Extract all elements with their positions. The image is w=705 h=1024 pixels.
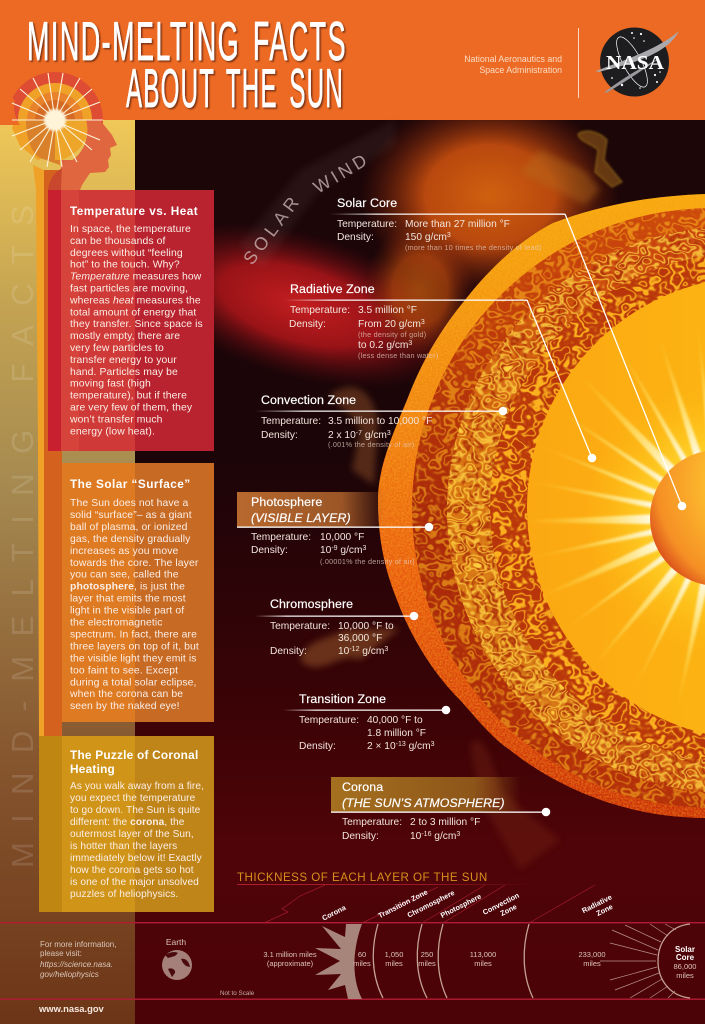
panel: temperature vs heat: moving fast (high (70, 379, 151, 390)
panel: the puzzle of coronal heating: As you walk away from a fire, (70, 781, 204, 792)
layer labels: Transition Zone (377, 887, 429, 920)
callout: chromosphere: Temperature: (270, 621, 330, 632)
panel: the solar surface: three layers on top of it, but (70, 641, 199, 652)
panel: temperature vs heat: hot” to the touch. Why? (70, 260, 180, 271)
panel: temperature vs heat: total amount of energy that (70, 307, 196, 318)
callout: convection zone: (.001% the density of air) (328, 440, 414, 449)
agency name: National Aeronautics and (464, 54, 562, 64)
thickness diagram (0, 885, 705, 1000)
callout: photosphere: (VISIBLE LAYER) (251, 511, 351, 525)
callout: convection zone: 3.5 million to 10,000 °F (328, 416, 432, 427)
callout: chromosphere: Chromosphere (270, 597, 353, 611)
callout: corona: Temperature: (342, 817, 402, 828)
agency name: Space Administration (479, 65, 562, 75)
panel: the puzzle of coronal heating: puzzles of heliophysics. (70, 889, 178, 900)
callout: photosphere: -9 (331, 545, 338, 552)
callout: corona: 10 (410, 831, 422, 842)
more information text: For more information, (40, 940, 116, 949)
layer thickness values: 86,000 (674, 962, 696, 971)
more information text (40, 940, 116, 979)
callout: convection zone: Convection Zone (261, 393, 356, 407)
panel: temperature vs heat: fast particles are moving, (70, 284, 188, 294)
panel: temperature vs heat: mostly empty, there are (70, 331, 180, 342)
callout: radiative zone: (less dense than water) (358, 351, 438, 360)
callout: photosphere: Density: (251, 545, 288, 556)
icon: corona spikes (315, 924, 362, 999)
callout: transition zone: Temperature: (299, 715, 359, 726)
callout: radiative zone (285, 282, 596, 462)
callout: transition zone: Transition Zone (299, 692, 386, 706)
panel: temperature vs heat: In space, the temperature (70, 224, 191, 235)
sun cross-section (370, 190, 705, 830)
scale note: Not to Scale (220, 990, 255, 997)
callout: chromosphere: Density: (270, 646, 307, 657)
panel: the puzzle of coronal heating (39, 736, 214, 912)
panel: the solar surface: layer that emits the most (70, 594, 186, 605)
panel: the solar surface: when the corona can be (69, 689, 183, 700)
heading: thickness of each layer: THICKNESS OF EACH LAYER OF THE SUN (237, 871, 488, 884)
callout: convection zone (255, 393, 507, 449)
callout: photosphere (237, 492, 433, 566)
panel: the solar surface: towards the core. The layer (70, 558, 199, 569)
icon: NASA logo (596, 28, 679, 96)
panel: the solar surface (62, 463, 214, 722)
panel: temperature vs heat: can be thousands of (70, 236, 166, 247)
layer thickness values: (approximate) (267, 959, 314, 968)
panel: temperature vs heat: temperature), but if there (70, 391, 187, 402)
callout: solar core: 150 g/cm (405, 232, 447, 243)
more information text: please visit: (40, 949, 82, 958)
panel: temperature vs heat: they transfer. Since space is (70, 319, 203, 330)
panel: the solar surface: , is just the (134, 582, 185, 593)
layer thickness values: 113,000 (470, 950, 496, 959)
gold left column (0, 120, 135, 1024)
website: www.nasa.gov (38, 1003, 105, 1014)
icon: solar core (600, 924, 690, 998)
panel: temperature vs heat: Temperature vs. Heat (70, 204, 198, 218)
layer labels: Convection (481, 891, 521, 917)
callout: solar core: (more than 10 times the density of lead) (405, 243, 542, 252)
callout: transition zone: 3 (431, 741, 435, 748)
layer labels (320, 887, 617, 925)
panel: temperature vs heat (48, 190, 214, 451)
more information text: gov/heliophysics (40, 970, 99, 979)
panel: the solar surface: the visible light they emit is (70, 653, 197, 664)
layer thickness values: 60 (358, 950, 366, 959)
callout: radiative zone: to 0.2 g/cm (358, 340, 408, 351)
callout: chromosphere: 10 (338, 646, 350, 657)
panel: temperature vs heat: whereas (69, 295, 113, 306)
callout: convection zone: 3 (387, 430, 391, 437)
panel: the solar surface: gas, the density gradually (70, 534, 191, 545)
orange header band (0, 0, 705, 120)
panel: temperature vs heat: won’t transfer much (69, 414, 163, 425)
panel: temperature vs heat: energy (low heat). (70, 426, 155, 437)
layer labels: Radiative (580, 892, 613, 915)
panel: the puzzle of coronal heating: immediately below it! Exactly (70, 853, 203, 864)
more information text: https://science.nasa. (40, 960, 113, 969)
icon: earth: Earth (166, 937, 186, 947)
callout: solar core: 3 (447, 232, 451, 239)
heading: solar wind (239, 120, 395, 268)
panel: temperature vs heat: Temperature (70, 272, 130, 283)
callout: convection zone: g/cm (362, 430, 387, 441)
callout: corona: Density: (342, 831, 379, 842)
callout: corona: g/cm (431, 831, 456, 842)
callout: convection zone: Density: (261, 430, 298, 441)
layer labels: Photosphere (439, 892, 483, 920)
panel: temperature vs heat: heat measures the (113, 295, 201, 306)
panel: temperature vs heat: degrees without “feeling (70, 248, 183, 259)
panel: the solar surface: you can see, called the (70, 570, 179, 581)
panel: the solar surface: spectrum. In fact, there are (70, 629, 197, 640)
panel: temperature vs heat: are very few of them, they (70, 402, 193, 414)
callout: transition zone: 2 × 10 (367, 741, 396, 752)
layer thickness values: 3.1 million miles (263, 950, 317, 959)
callout: photosphere: 3 (362, 545, 366, 552)
layer thickness values: 250 (421, 950, 433, 959)
callout: transition zone: Density: (299, 741, 336, 752)
panel: the puzzle of coronal heating: to go down. The Sun is quite (70, 805, 201, 816)
callout: convection zone: Temperature: (261, 416, 321, 427)
callout: corona: (THE SUN’S ATMOSPHERE) (342, 796, 504, 810)
callout: solar core: More than 27 million °F (405, 219, 510, 230)
callout: corona: 3 (456, 831, 460, 838)
callout: solar core: Temperature: (337, 219, 397, 230)
callout: photosphere: (.00001% the density of air) (320, 557, 415, 566)
agency name (464, 54, 562, 75)
callout: chromosphere: -12 (349, 646, 360, 653)
layer thickness values: miles (583, 959, 601, 968)
layer thickness values: 1,050 (385, 950, 403, 959)
icon: earth (162, 937, 192, 980)
callout: photosphere: Temperature: (251, 532, 311, 543)
panel: the puzzle of coronal heating: is hotter than the layers (70, 841, 177, 852)
panel: temperature vs heat: transfer energy to your (70, 355, 177, 366)
panel: the solar surface: during a total solar eclipse, (70, 677, 197, 688)
callout: convection zone: 2 x 10 (328, 430, 356, 441)
callout: chromosphere: 3 (384, 646, 388, 653)
callout: transition zone: 40,000 °F to (367, 715, 423, 726)
callout: radiative zone: From 20 g/cm (358, 319, 421, 330)
callout: radiative zone: Density: (289, 319, 326, 330)
panel: the puzzle of coronal heating: The Puzzle of Coronal (70, 748, 198, 762)
panel: the solar surface: light in the visible part of (70, 606, 184, 617)
callout: radiative zone: (the density of gold) (358, 330, 426, 339)
panel: the solar surface: the electromagnetic (70, 618, 163, 628)
panel: temperature vs heat: measures how (130, 272, 202, 283)
panel: the solar surface: ball of plasma, or ionized (70, 522, 188, 533)
panel: temperature vs heat: very few particles to (70, 343, 164, 354)
layer thickness values: miles (474, 959, 492, 968)
callout: chromosphere: g/cm (359, 646, 384, 657)
vertical title: MIND-MELTING FACTS: MIND-MELTING FACTS (5, 205, 40, 868)
layer labels: Zone (595, 902, 614, 918)
layer thickness values: miles (353, 959, 371, 968)
callout: solar core (330, 196, 686, 510)
icon: NASA logo: NASA (606, 52, 665, 74)
callout: solar core: Solar Core (337, 196, 397, 210)
layer labels: Corona (320, 903, 348, 923)
layer thickness values: miles (385, 959, 403, 968)
layer thickness values: miles (676, 971, 694, 980)
callout: corona: -16 (421, 831, 432, 838)
callout: photosphere: g/cm (338, 545, 362, 556)
layer thickness values: miles (418, 959, 436, 968)
heading: solar wind: SOLAR (239, 190, 305, 268)
panel: the puzzle of coronal heating: outermost layer of the Sun, (70, 829, 194, 840)
layer labels: Chromosphere (406, 888, 456, 920)
text: MIND-MELTING FACTS (27, 10, 347, 72)
panel: the puzzle of coronal heating: different: the (70, 817, 130, 828)
callout: convection zone: -7 (356, 430, 362, 437)
panel: the solar surface: The Sun does not have a (70, 498, 189, 509)
layer thickness values: Solar (675, 945, 695, 954)
icon: head silhouettes with sun burst (0, 72, 117, 736)
callout: transition zone: 1.8 million °F (367, 728, 426, 739)
callout: photosphere: Photosphere (251, 495, 322, 509)
panel: the solar surface: photosphere (70, 582, 134, 593)
panel: the solar surface: too faint to see. Except (70, 665, 178, 676)
panel: the solar surface: seen by the naked eye! (70, 701, 180, 712)
callout: transition zone: g/cm (406, 741, 431, 752)
callout: radiative zone: 3 (408, 340, 412, 347)
callout: radiative zone: Radiative Zone (290, 282, 375, 296)
callout: corona (331, 777, 550, 842)
panel: the puzzle of coronal heating: how the corona gets so hot (70, 865, 194, 876)
callout: radiative zone: 3.5 million °F (358, 305, 417, 316)
panel: the solar surface: The Solar “Surface” (70, 477, 191, 491)
panel: the puzzle of coronal heating: you expect the temperature (70, 793, 196, 804)
callout: photosphere: 10 (320, 545, 332, 556)
panel: the puzzle of coronal heating: Heating (70, 762, 115, 776)
panel: the puzzle of coronal heating: is one of the major unsolved (70, 877, 199, 888)
callout: transition zone: -13 (396, 741, 406, 748)
callout: radiative zone: Temperature: (290, 305, 350, 316)
callout: corona: 2 to 3 million °F (410, 817, 480, 828)
callout: chromosphere: 36,000 °F (338, 633, 382, 644)
callout: photosphere: 10,000 °F (320, 532, 364, 543)
main title (27, 10, 347, 119)
callout: radiative zone: 3 (421, 319, 425, 326)
layer labels: Zone (499, 902, 518, 918)
divider (578, 28, 579, 98)
layer thickness values: Core (676, 953, 695, 962)
panel: temperature vs heat: hand. Particles may be (70, 367, 178, 378)
panel: the solar surface: solid “surface”– as a giant (70, 510, 192, 521)
panel: the solar surface: increases as you move (70, 546, 178, 557)
layer boundaries (373, 924, 533, 998)
callout: corona: Corona (342, 780, 383, 794)
callout: solar core: Density: (337, 232, 374, 243)
heading: solar wind: WIND (310, 148, 373, 197)
callout: chromosphere: 10,000 °F to (338, 621, 394, 632)
callout: transition zone (283, 692, 450, 752)
layer thickness values: 233,000 (578, 950, 606, 959)
layer thickness values (263, 945, 696, 980)
callout: chromosphere (255, 597, 418, 657)
panel: the puzzle of coronal heating: corona, the (130, 817, 184, 828)
text: ABOUT THE SUN (126, 57, 344, 119)
background: solar flares and clouds (122, 95, 622, 870)
